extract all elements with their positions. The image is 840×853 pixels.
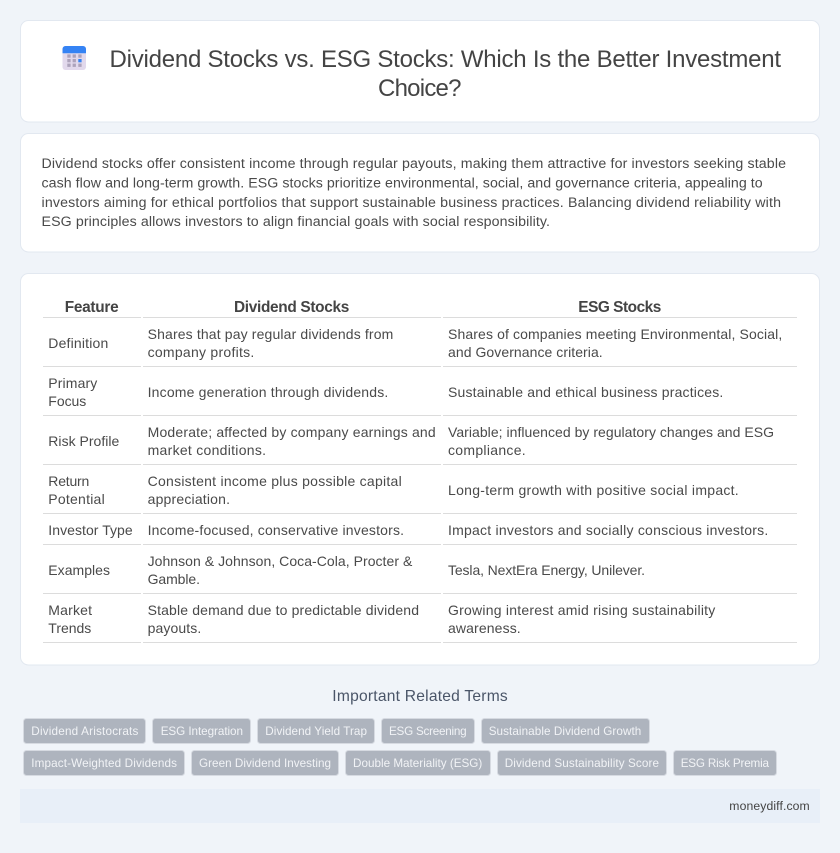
tag: ESG Risk Premia xyxy=(674,750,776,776)
tag: Sustainable Dividend Growth: Sustainable Dividend Growth xyxy=(489,725,641,738)
tag: Dividend Yield Trap xyxy=(258,718,374,744)
row: market trends: Market xyxy=(48,602,92,618)
tag: Double Materiality (ESG) xyxy=(346,750,490,776)
panel: introduction xyxy=(20,134,820,252)
text block: introduction: ESG principles allows investors to align financial goals with social responsibility. xyxy=(42,214,550,230)
row: primary focus: Income generation through dividends. xyxy=(148,384,388,400)
row: risk profile: compliance. xyxy=(448,442,526,458)
table header: ESG Stocks xyxy=(578,299,661,316)
row: primary focus: Sustainable and ethical business practices. xyxy=(448,384,723,400)
footer xyxy=(20,789,820,823)
row: market trends xyxy=(43,602,797,643)
row: examples: Johnson & Johnson, Coca-Cola, Procter & xyxy=(148,553,413,569)
row: definition: Shares that pay regular dividends from xyxy=(148,326,393,342)
row: market trends: Stable demand due to predictable dividend xyxy=(148,602,419,618)
panel: comparison table xyxy=(20,274,820,665)
table header xyxy=(43,299,797,318)
row: risk profile xyxy=(43,424,797,465)
row: definition: and Governance criteria. xyxy=(448,344,603,360)
icon: calendar xyxy=(62,46,86,70)
row: return potential: appreciation. xyxy=(148,491,230,507)
row: definition: Shares of companies meeting Environmental, Social, xyxy=(448,326,782,342)
tag: ESG Screening: ESG Screening xyxy=(389,725,467,738)
row: examples: Gamble. xyxy=(148,571,200,587)
row: return potential: Potential xyxy=(48,491,105,507)
tag: ESG Screening xyxy=(382,718,474,744)
row: risk profile: Variable; influenced by regulatory changes and ESG xyxy=(448,424,774,440)
row: investor type: Impact investors and socially conscious investors. xyxy=(448,522,768,538)
tag: Green Dividend Investing xyxy=(192,750,338,776)
row: investor type xyxy=(43,522,797,545)
text block: introduction: investors aiming for ethical portfolios that support sustainable business practices. Balancing dividend reliability with xyxy=(42,195,781,211)
row: risk profile: market conditions. xyxy=(148,442,266,458)
title: Dividend Stocks vs. ESG Stocks: Which Is the Better Investment xyxy=(110,46,781,73)
row: examples: Tesla, NextEra Energy, Unilever. xyxy=(448,562,645,578)
row: examples: Examples xyxy=(48,562,110,578)
text block: introduction: Dividend stocks offer consistent income through regular payouts, making them attractive for investors seeking stable xyxy=(42,156,786,172)
tag: Dividend Sustainability Score: Dividend Sustainability Score xyxy=(505,757,659,770)
tag: Impact-Weighted Dividends: Impact-Weighted Dividends xyxy=(31,757,177,770)
text block: introduction xyxy=(42,156,786,230)
row: definition xyxy=(43,326,797,367)
row: return potential: Long-term growth with positive social impact. xyxy=(448,482,739,498)
row: definition: Definition xyxy=(48,335,108,351)
panel: related term tags xyxy=(24,718,776,776)
tag: Double Materiality (ESG): Double Materiality (ESG) xyxy=(353,757,482,770)
tag: ESG Integration: ESG Integration xyxy=(161,725,243,738)
row: return potential: Return xyxy=(48,473,89,489)
row: market trends: Trends xyxy=(48,620,91,636)
row: return potential xyxy=(43,473,797,514)
title xyxy=(110,46,781,102)
panel: header xyxy=(20,20,820,122)
table header: Feature xyxy=(65,299,119,316)
tag: ESG Risk Premia: ESG Risk Premia xyxy=(681,757,769,770)
tag: Dividend Sustainability Score xyxy=(498,750,666,776)
tag: Impact-Weighted Dividends xyxy=(24,750,184,776)
footer: moneydiff.com xyxy=(729,799,810,813)
row: market trends: payouts. xyxy=(148,620,201,636)
tag: Dividend Yield Trap: Dividend Yield Trap xyxy=(265,725,367,738)
row: market trends: Growing interest amid rising sustainability xyxy=(448,602,715,618)
text block: introduction: cash flow and long-term growth. ESG stocks prioritize environmental, social, and governance criteria, appealing to xyxy=(42,176,763,192)
table header: Dividend Stocks xyxy=(234,299,349,316)
row: return potential: Consistent income plus possible capital xyxy=(148,473,402,489)
tag: Green Dividend Investing: Green Dividend Investing xyxy=(199,757,331,770)
title: Choice? xyxy=(378,75,462,102)
heading: related terms: Important Related Terms xyxy=(332,688,508,705)
row: primary focus: Focus xyxy=(48,393,86,409)
tag: Dividend Aristocrats xyxy=(24,718,146,744)
tag: ESG Integration xyxy=(152,718,250,744)
row: investor type: Investor Type xyxy=(48,522,133,538)
row: risk profile: Risk Profile xyxy=(48,433,120,449)
row: investor type: Income-focused, conservative investors. xyxy=(148,522,404,538)
row: market trends: awareness. xyxy=(448,620,521,636)
row: primary focus xyxy=(43,375,797,416)
row: definition: company profits. xyxy=(148,344,254,360)
row: examples xyxy=(43,553,797,594)
tag: Dividend Aristocrats: Dividend Aristocrats xyxy=(31,725,138,738)
row: risk profile: Moderate; affected by company earnings and xyxy=(148,424,436,440)
row: primary focus: Primary xyxy=(48,375,97,391)
tag: Sustainable Dividend Growth xyxy=(482,718,650,744)
